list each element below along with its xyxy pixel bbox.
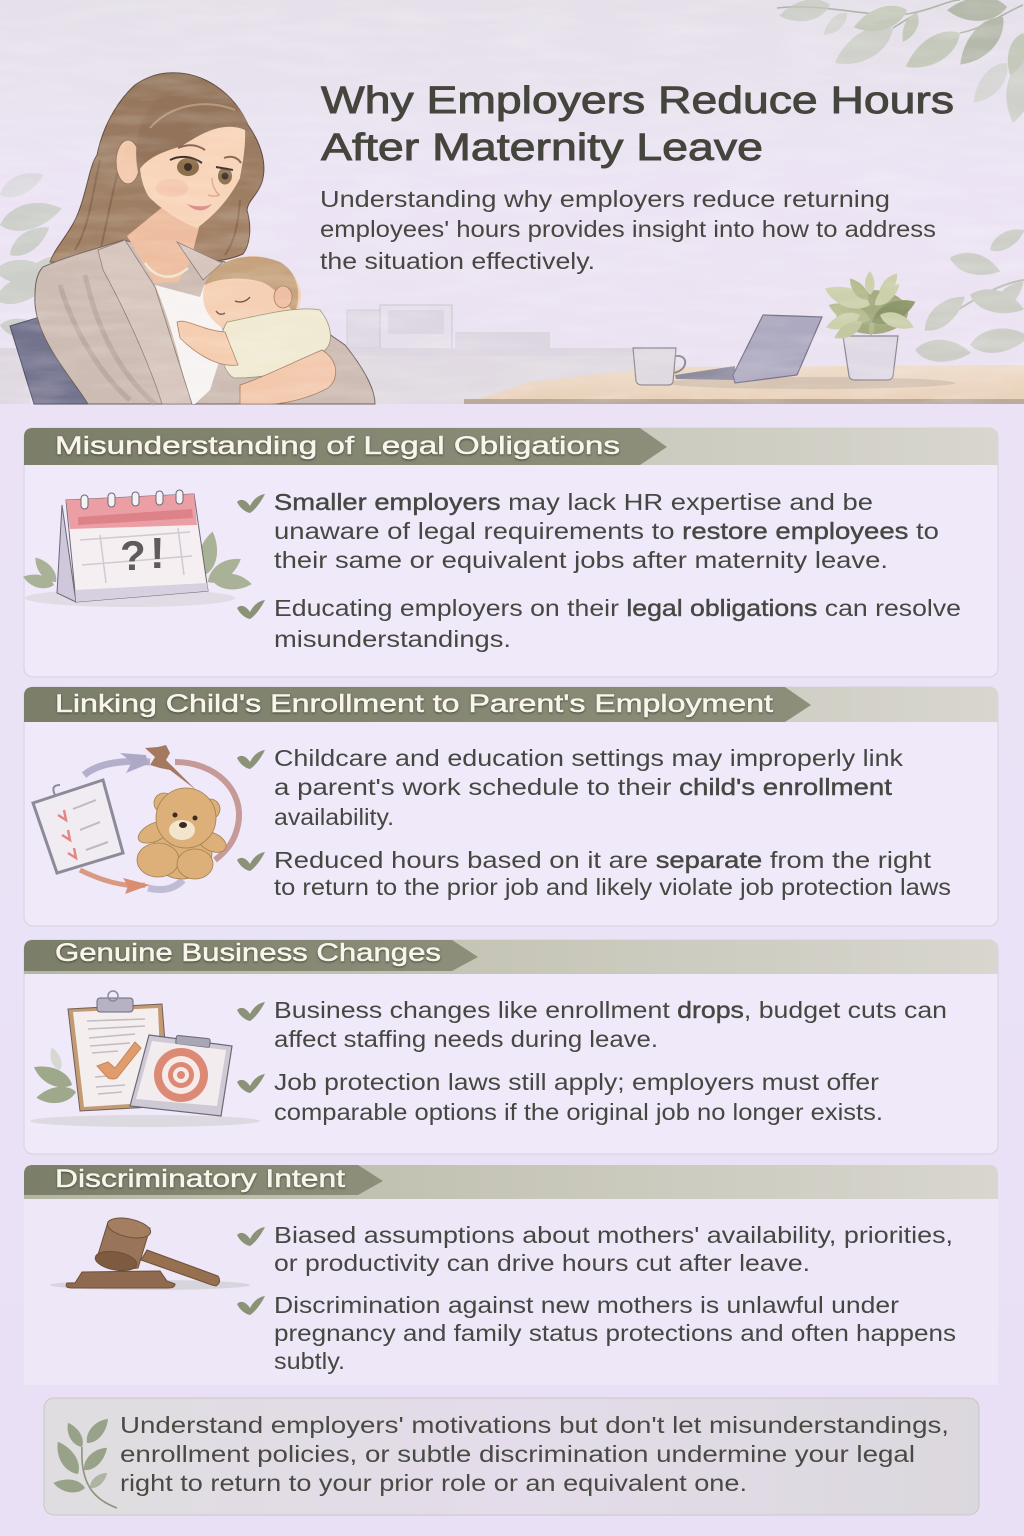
intro text: Understanding why employers reduce returning — [320, 186, 890, 212]
bullet points: their same or equivalent jobs after maternity leave. — [274, 547, 888, 573]
face — [140, 120, 245, 228]
section heading — [24, 1165, 383, 1195]
fringe — [136, 87, 249, 172]
baby arm — [177, 321, 238, 365]
blazer lapels — [98, 240, 222, 404]
bullet points: to return to the prior job and likely violate job protection laws — [274, 874, 951, 900]
bullet points: Job protection laws still apply; employers must offer — [274, 1069, 879, 1095]
bullet points: Childcare and education settings may improperly link — [274, 745, 904, 771]
foliage: top right — [777, 0, 1024, 125]
section heading: Genuine Business Changes — [55, 939, 441, 967]
intro text: the situation effectively. — [320, 248, 595, 274]
bullet points — [237, 745, 951, 900]
hair strands — [75, 160, 240, 255]
bullet points: misunderstandings. — [274, 626, 511, 652]
bullet points: comparable options if the original job no longer exists. — [274, 1099, 883, 1125]
section band — [24, 687, 998, 722]
section band — [24, 1165, 998, 1199]
icon: clipboards with check mark and target — [30, 991, 260, 1127]
bullet points: affect staffing needs during leave. — [274, 1026, 658, 1052]
icon: gavel — [50, 1215, 250, 1290]
section heading: Discriminatory Intent — [55, 1165, 345, 1193]
section heading — [24, 687, 811, 722]
mother's hand and sleeve — [240, 350, 336, 404]
baby head — [203, 256, 301, 336]
callout: key takeaway — [44, 1398, 979, 1515]
callout text — [120, 1412, 949, 1496]
bullet points — [237, 489, 961, 652]
section heading — [24, 939, 478, 971]
bullet points: Business changes like enrollment drops , budget cuts can — [274, 997, 947, 1023]
office chair — [10, 317, 88, 404]
bullet points: Reduced hours based on it are separate from the right — [274, 847, 932, 873]
title: Why Employers Reduce Hours — [321, 80, 954, 122]
hair back — [50, 73, 264, 262]
callout text: enrollment policies, or subtle discrimination undermine your legal — [120, 1441, 915, 1467]
illustration: mother holding sleeping baby — [10, 73, 375, 404]
panel: discriminatory intent — [24, 1165, 998, 1385]
bullet points: a parent's work schedule to their child's enrollment — [274, 774, 893, 800]
panel: misunderstanding of legal obligations — [21, 428, 998, 677]
foliage: left background — [0, 166, 65, 351]
bullet points: pregnancy and family status protections and often happens — [274, 1320, 956, 1346]
icon: calendar with question and exclamation — [21, 490, 253, 607]
background desk and shelves — [0, 305, 640, 404]
section heading: Linking Child's Enrollment to Parent's Employment — [55, 690, 773, 718]
section heading: Misunderstanding of Legal Obligations — [55, 432, 620, 460]
ear — [116, 140, 140, 184]
blazer — [35, 240, 375, 404]
potted plant — [822, 270, 919, 380]
blazer sleeve shading — [60, 275, 155, 404]
icon: calendar with question and exclamation: ! — [150, 529, 165, 578]
icon: sprig of leaves — [51, 1415, 117, 1508]
bullet points: Educating employers on their legal obligations can resolve — [274, 595, 961, 621]
section band — [24, 428, 998, 465]
intro text: employees' hours provides insight into how to address — [320, 216, 936, 242]
neck and shirt — [127, 205, 205, 283]
bullet points: Smaller employers may lack HR expertise and be — [274, 489, 873, 515]
decorative paper texture — [0, 0, 1024, 404]
bullet points: unaware of legal requirements to restore employees to — [274, 518, 939, 544]
eyes and brows — [156, 145, 241, 210]
panel: linking child's enrollment to parent's employment — [24, 687, 998, 926]
callout text: Understand employers' motivations but don't let misunderstandings, — [120, 1412, 949, 1438]
bullet points — [237, 997, 947, 1125]
section band — [24, 940, 998, 974]
intro text — [320, 186, 936, 274]
bullet points — [237, 1222, 956, 1374]
baby blanket — [221, 309, 330, 378]
laptop — [675, 315, 822, 383]
coffee cup — [633, 348, 685, 385]
icon: checklist, gavel arrows and teddy bear — [33, 745, 239, 894]
icon: calendar with question and exclamation: ? — [120, 532, 146, 579]
bullet points: availability. — [274, 804, 394, 830]
necklace — [145, 263, 188, 277]
bullet points: or productivity can drive hours cut after leave. — [274, 1250, 810, 1276]
foreground table — [464, 365, 1024, 404]
title — [321, 80, 954, 169]
foliage: right background — [914, 223, 1024, 363]
title: After Maternity Leave — [321, 127, 763, 169]
panel: genuine business changes — [24, 939, 998, 1154]
header illustration scene — [0, 0, 1024, 404]
bullet points: Biased assumptions about mothers' availability, priorities, — [274, 1222, 953, 1248]
callout text: right to return to your prior role or an equivalent one. — [120, 1470, 747, 1496]
section heading — [24, 428, 667, 465]
bullet points: Discrimination against new mothers is unlawful under — [274, 1292, 899, 1318]
bullet points: subtly. — [274, 1348, 345, 1374]
